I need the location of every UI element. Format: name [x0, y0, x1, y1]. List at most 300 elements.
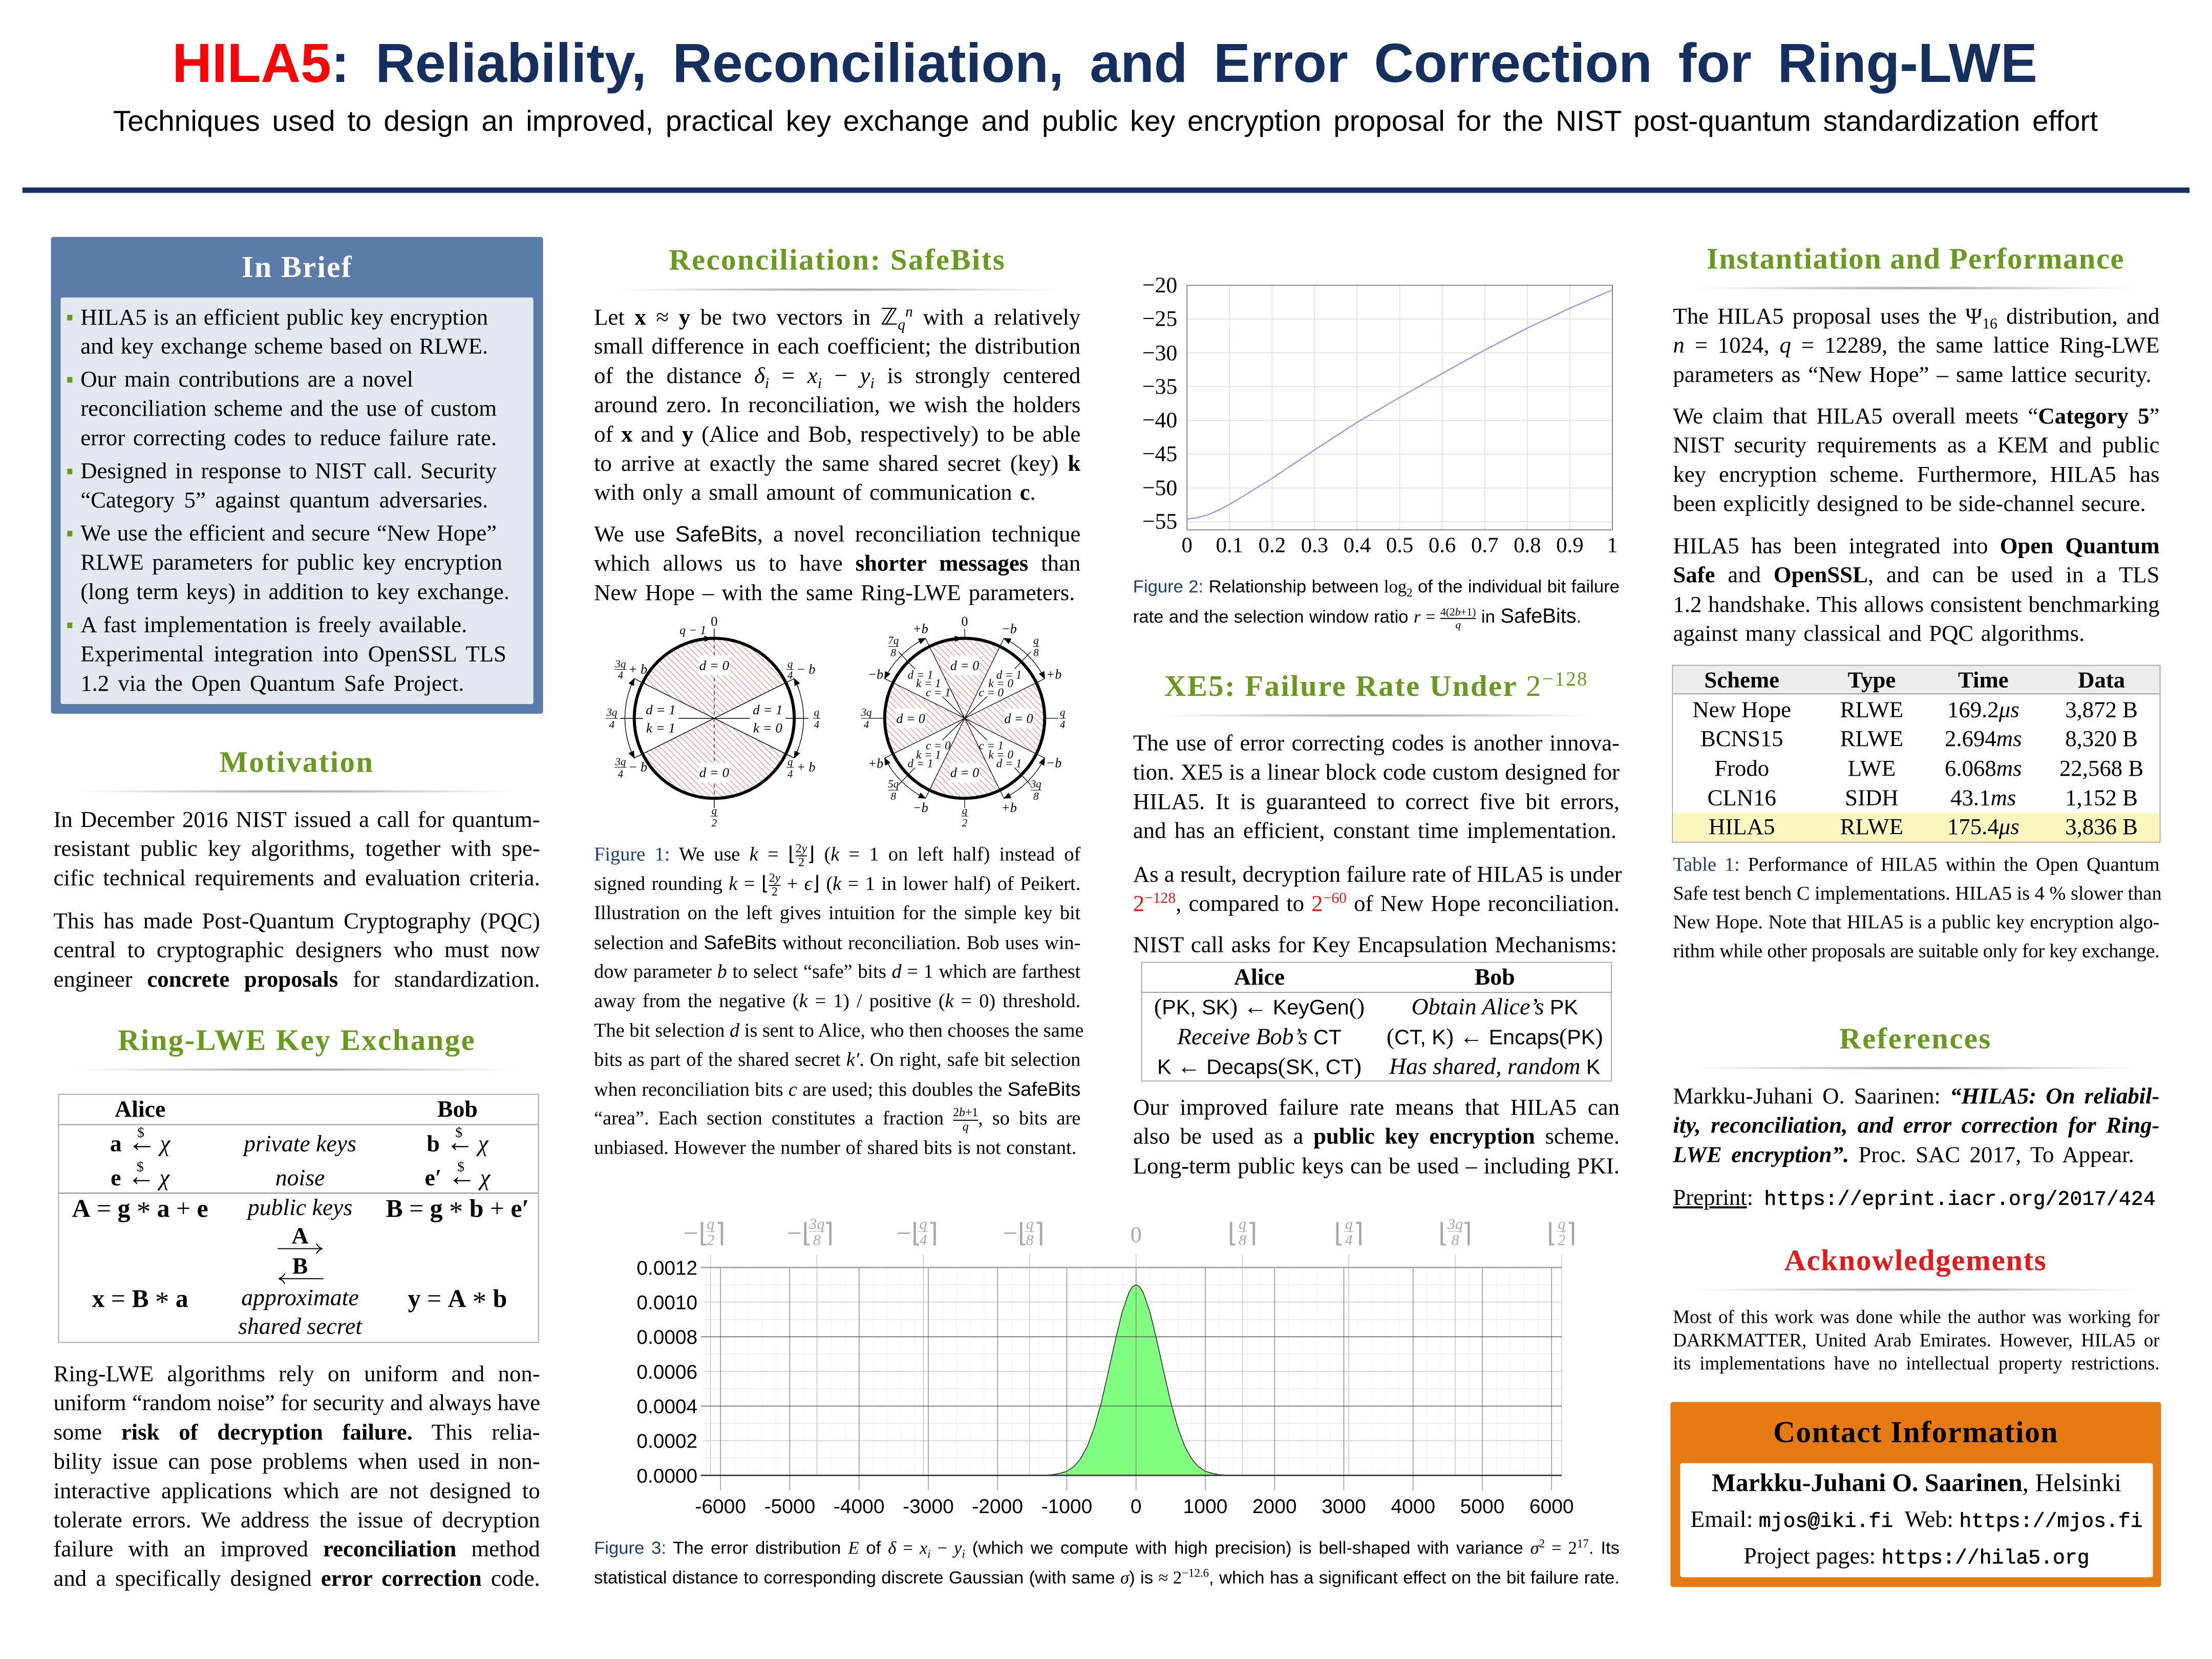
- heading: Ring-LWE Key Exchange: Ring-LWE Key Exchange: [118, 1023, 476, 1057]
- plot area with grid and bell curve: 4000: [1391, 1496, 1435, 1518]
- q fraction labels: ⌉: [1353, 1219, 1364, 1248]
- heading: Reconciliation SafeBits: Reconciliation: SafeBits: [669, 243, 1006, 276]
- header rule: [23, 187, 2189, 193]
- text: ring-LWE explanation: bility issue can pose problems when used in non-: [53, 1449, 540, 1474]
- chart: figure 2 failure rate line: 0.5: [1386, 534, 1413, 558]
- chart: figure 3 error distribution: 0.0000: [636, 1465, 697, 1487]
- right circle diagram: 0: [962, 614, 968, 629]
- chart: figure 2 failure rate line: 0: [1182, 534, 1193, 558]
- bullet 5: 1.2 via the Open Quantum Safe Project.: [80, 670, 464, 696]
- chart: figure 2 failure rate line: 0.4: [1344, 534, 1371, 558]
- text: reference citation: LWE encryption”. Proc. SAC 2017, To Appear.: [1673, 1141, 2134, 1167]
- right circle diagram: k = 0: [988, 748, 1013, 761]
- bullet 3: Designed in response to NIST call. Security: [80, 458, 497, 483]
- heading: References: References: [1839, 1022, 1992, 1055]
- text: instantiation paragraph 2: been explicitly designed to be side-channel secure.: [1673, 491, 2146, 516]
- right circle diagram: d = 1: [996, 668, 1022, 681]
- caption: figure 1: 2y: [769, 871, 780, 885]
- chart: figure 2 failure rate line: −35: [1142, 374, 1177, 399]
- q fraction labels: q: [920, 1216, 927, 1232]
- table: key exchange protocol: b χ: [427, 1131, 488, 1157]
- right circle diagram: d = 1: [996, 757, 1022, 770]
- text: reconciliation paragraph 1: with only a small amount of communication c.: [594, 480, 1036, 505]
- table: key exchange protocol: approximate: [241, 1284, 359, 1310]
- text: reference citation: ity, reconciliation, and error correction for Ring-: [1673, 1112, 2160, 1138]
- q fraction labels: 8: [1026, 1232, 1033, 1249]
- left circle diagram: 0: [711, 613, 718, 629]
- plot area with grid and bell curve: -5000: [764, 1496, 815, 1518]
- table: key exchange protocol: x = B * a: [92, 1284, 188, 1317]
- q fraction labels: ⌉: [1566, 1219, 1577, 1248]
- bullet 5: A fast implementation is freely available.: [80, 612, 467, 637]
- left circle diagram: 3q: [606, 706, 617, 718]
- bullet 1: [80, 303, 488, 361]
- text: reference citation: [1673, 1081, 2160, 1169]
- chart: figure 2 failure rate line: 0.2: [1259, 534, 1286, 558]
- table: performance comparison: Time: [1958, 667, 2009, 693]
- chart: figure 2 failure rate line: −50: [1142, 476, 1177, 500]
- text: ring-LWE explanation: tolerate errors. We address the issue of decryption: [53, 1507, 540, 1533]
- q fraction labels: 2: [1558, 1232, 1565, 1249]
- caption: table 1: [1673, 850, 2160, 965]
- text: motivation paragraph 2: [53, 906, 540, 994]
- contact details: Project pages: https://hila5.org: [1743, 1543, 2090, 1570]
- caption: figure 1: Figure 1: We use k = ⌊ ⌋ (k = 1 on left half) instead of: [594, 844, 1080, 865]
- table: performance comparison: 6.068ms: [1945, 755, 2022, 781]
- text: motivation paragraph 1: cific technical requirements and evaluation criteria.: [53, 865, 540, 890]
- text: ring-LWE explanation: interactive applications which are not designed to: [53, 1478, 540, 1503]
- table: key exchange protocol: $: [455, 1125, 462, 1141]
- table: performance comparison: 1,152 B: [2065, 785, 2138, 810]
- text: XE5 paragraph 2: As a result, decryption failure rate of HILA5 is under: [1133, 861, 1622, 887]
- table: performance comparison: SIDH: [1845, 785, 1899, 810]
- left circle diagram: 3q: [614, 657, 626, 670]
- text: instantiation paragraph 3: HILA5 has been integrated into Open Quantum: [1673, 533, 2160, 558]
- table: key exchange protocol: B = g * b + e′: [386, 1194, 529, 1227]
- right circle diagram: 7q: [888, 634, 899, 647]
- right circle diagram: c = 1: [926, 686, 951, 699]
- left circle diagram: − b: [628, 759, 647, 774]
- arrow: A to Bob: [278, 1243, 324, 1255]
- bullet 3: [80, 456, 497, 515]
- left circle diagram: − b: [797, 662, 815, 676]
- plot area with grid and bell curve: 3000: [1322, 1496, 1366, 1518]
- text: instantiation paragraph 2: NIST security requirements as a KEM and public: [1673, 432, 2160, 458]
- caption: figure 2: 4(2b+1): [1440, 606, 1476, 618]
- left circle diagram: 4: [788, 669, 793, 681]
- right circle diagram: c = 0: [926, 739, 951, 752]
- chart: figure 2 failure rate line: −40: [1142, 408, 1177, 433]
- text: reconciliation paragraph 1: to arrive at exactly the same shared secret (key) k: [594, 450, 1080, 476]
- bullet 2: error correcting codes to reduce failure rate.: [80, 425, 497, 450]
- chart: figure 2 failure rate line: 0.1: [1216, 534, 1243, 558]
- text: XE5 paragraph 1: The use of error correcting codes is another innova-: [1133, 730, 1620, 755]
- right circle diagram: −b: [868, 667, 883, 682]
- right circle diagram: 3q: [1030, 778, 1041, 790]
- table: key exchange protocol: noise: [275, 1164, 325, 1190]
- chart: figure 2 failure rate line: −25: [1142, 307, 1177, 331]
- q fraction labels: ⌉: [1034, 1219, 1045, 1248]
- caption: figure 1: away from the negative (k = 1) / positive (k = 0) threshold.: [594, 990, 1080, 1012]
- left circle diagram: q: [712, 804, 717, 817]
- right circle diagram: q: [1060, 706, 1065, 718]
- right circle diagram: −b: [1001, 622, 1017, 636]
- table: key exchange protocol: [58, 1094, 539, 1343]
- left circle diagram: q − 1: [679, 624, 706, 637]
- table: performance comparison: 2.694ms: [1945, 726, 2022, 751]
- left circle diagram: d = 0: [699, 764, 730, 780]
- table: key exchange protocol: A: [291, 1223, 309, 1249]
- right circle diagram: +b: [868, 756, 883, 771]
- text: motivation paragraph 1: In December 2016 NIST issued a call for quantum-: [53, 806, 540, 832]
- bullet 3: “Category 5” against quantum adversaries.: [80, 487, 488, 513]
- text: acknowledgements: its implementations have no intellectual property restrictions.: [1673, 1353, 2160, 1374]
- bullet 2: reconciliation scheme and the use of custom: [80, 395, 497, 421]
- right circle diagram: k = 0: [988, 677, 1013, 690]
- chart: figure 2 failure rate line: 1: [1607, 534, 1618, 558]
- text: ring-LWE explanation: Ring-LWE algorithms rely on uniform and non-: [53, 1360, 540, 1386]
- table: performance comparison: 3,872 B: [2065, 697, 2138, 722]
- q fraction labels: 8: [813, 1232, 821, 1249]
- text: reconciliation paragraph 2: which allows us to have shorter messages than: [594, 550, 1080, 576]
- q fraction labels: ⌊: [1438, 1219, 1449, 1248]
- table: key exchange protocol: ←: [445, 1126, 474, 1158]
- text: ring-LWE explanation: some risk of decryption failure. This relia-: [53, 1419, 540, 1444]
- panel: contact information: [1670, 1402, 2161, 1587]
- right circle diagram: −b: [912, 800, 928, 815]
- chart: figure 2 failure rate line: 0.7: [1471, 534, 1498, 558]
- q fraction labels: 8: [1239, 1232, 1246, 1249]
- left circle diagram: 2: [712, 817, 717, 829]
- caption: figure 1: bits as part of the shared secret k′. On right, safe bit selection: [594, 1049, 1080, 1071]
- bullet 4: RLWE parameters for public key encryption: [80, 549, 502, 575]
- heading: contact information: Contact Information: [1773, 1415, 2058, 1449]
- text: ring-LWE explanation: failure with an improved reconciliation method: [53, 1536, 540, 1562]
- table: performance comparison: Frodo: [1714, 755, 1769, 781]
- text: XE5 conclusion: Long-term public keys can be used – including PKI.: [1133, 1153, 1620, 1178]
- q fraction labels: −⌊: [684, 1219, 709, 1248]
- caption: figure 3: [594, 1534, 1620, 1592]
- caption: figure 1: The bit selection d is sent to Alice, who then chooses the same: [594, 1019, 1083, 1041]
- q fraction labels: 3q: [809, 1216, 824, 1232]
- table: key exchange protocol: private keys: [244, 1131, 356, 1157]
- heading: XE5 failure rate: XE5: Failure Rate Under 2−128: [1164, 668, 1588, 703]
- table: key exchange protocol: Bob: [437, 1096, 478, 1122]
- right circle diagram: d = 1: [908, 757, 933, 770]
- bullet 5: [80, 610, 506, 698]
- heading: In Brief: In Brief: [242, 250, 352, 284]
- table: key exchange protocol: e χ: [111, 1164, 169, 1190]
- text: reconciliation paragraph 2: We use SafeBits, a novel reconciliation technique: [594, 521, 1080, 547]
- caption: table 1: Safe test bench C implementations. HILA5 is 4 % slower than: [1673, 883, 2162, 904]
- caption: figure 1: q: [963, 1120, 969, 1133]
- caption: figure 1: unbiased. However the number of shared bits is not constant.: [594, 1137, 1076, 1158]
- left circle diagram: 4: [788, 768, 793, 780]
- text: XE5 paragraph 2: [1133, 860, 1620, 919]
- q fraction labels: 8: [1452, 1232, 1459, 1249]
- left circle diagram: 4: [618, 768, 623, 780]
- q fraction labels: ⌉: [1462, 1219, 1472, 1248]
- plot area with grid and bell curve: 0: [1131, 1496, 1142, 1518]
- heading: Acknowledgements: Acknowledgements: [1784, 1243, 2047, 1277]
- plot area with grid and bell curve: -4000: [834, 1496, 885, 1518]
- table: performance comparison: RLWE: [1840, 697, 1903, 722]
- plot area with grid and bell curve: 5000: [1460, 1496, 1504, 1518]
- caption: figure 1: 2y: [796, 842, 807, 856]
- right circle diagram: q: [962, 804, 967, 817]
- table: performance comparison: New Hope: [1692, 697, 1791, 722]
- text: XE5 conclusion: also be used as a public key encryption scheme.: [1133, 1123, 1620, 1149]
- caption: figure 1: when reconciliation bits c are used; this doubles the SafeBits: [594, 1078, 1080, 1100]
- caption: figure 1: 2: [798, 856, 804, 869]
- q fraction labels: 3q: [1447, 1216, 1463, 1232]
- table: KEM operations: Obtain Alice’s PK: [1412, 993, 1578, 1019]
- caption: figure 1: Illustration on the left gives intuition for the simple key bit: [594, 902, 1080, 924]
- table: performance comparison: 3,836 B: [2065, 814, 2138, 839]
- text: reconciliation paragraph 2: [594, 520, 1080, 607]
- table: performance comparison: 43.1ms: [1950, 785, 2016, 810]
- text: XE5 paragraph 1: tion. XE5 is a linear block code custom designed for: [1133, 759, 1620, 785]
- text: motivation paragraph 2: This has made Post-Quantum Cryptography (PQC): [53, 908, 540, 933]
- text: XE5 paragraph 1: and has an efficient, constant time implementation.: [1133, 818, 1617, 843]
- right circle diagram: 8: [891, 646, 897, 658]
- q fraction labels: q: [1239, 1216, 1246, 1232]
- text: instantiation paragraph 1: n = 1024, q = 12289, the same lattice Ring-LWE: [1673, 332, 2160, 358]
- table: KEM operations: Alice: [1234, 964, 1285, 990]
- q fraction labels: 2: [707, 1232, 714, 1249]
- table: KEM operations: (CT, K) ← Encaps(PK): [1387, 1024, 1603, 1050]
- text: instantiation paragraph 3: 1.2 handshake. This allows consistent benchmarking: [1673, 591, 2160, 617]
- chart: figure 2 failure rate line: 0.3: [1301, 534, 1328, 558]
- text: reconciliation paragraph 1: of x and y (Alice and Bob, respectively) to be able: [594, 421, 1080, 446]
- right circle diagram: q: [1033, 634, 1039, 647]
- text: reconciliation paragraph 1: Let x ≈ y be two vectors in ℤqn with a relatively: [594, 304, 1080, 333]
- text: reconciliation paragraph 1: around zero. In reconciliation, we wish the holders: [594, 392, 1080, 417]
- table: key exchange protocol: shared secret: [238, 1313, 362, 1339]
- q fraction labels: 0: [1131, 1223, 1142, 1247]
- plot area with grid and bell curve: [695, 1254, 1574, 1518]
- plot area with grid and bell curve: -1000: [1041, 1496, 1092, 1518]
- text: ring-LWE explanation: [53, 1359, 540, 1593]
- table: performance comparison: 22,568 B: [2059, 755, 2143, 781]
- chart: figure 2 failure rate line: −55: [1142, 509, 1177, 534]
- q fraction labels: ⌉: [823, 1219, 834, 1248]
- bullet marker: [67, 623, 72, 628]
- right circle diagram: −b: [1046, 755, 1061, 770]
- text: instantiation paragraph 2: We claim that HILA5 overall meets “Category 5”: [1673, 403, 2160, 429]
- left circle diagram: d = 0: [699, 657, 730, 673]
- text: motivation paragraph 2: engineer concrete proposals for standardization.: [53, 966, 540, 992]
- text: XE5 conclusion: [1133, 1093, 1620, 1180]
- table: key exchange protocol: a χ: [110, 1131, 170, 1157]
- left circle diagram: q: [788, 657, 793, 670]
- text: motivation paragraph 1: [53, 805, 540, 892]
- right circle diagram: 5q: [888, 778, 899, 790]
- table: key exchange protocol: A = g * a + e: [72, 1194, 208, 1227]
- q fraction labels: ⌉: [1247, 1219, 1258, 1248]
- text: reconciliation paragraph 1: small difference in each coefficient; the distribution: [594, 333, 1080, 359]
- text: preprint link: Preprint: https://eprint.iacr.org/2017/424: [1673, 1184, 2156, 1211]
- bullet 5: Experimental integration into OpenSSL TLS: [80, 641, 506, 667]
- right circle diagram: 4: [1060, 718, 1065, 731]
- plot area with grid and bell curve: 1000: [1183, 1496, 1227, 1518]
- plot area with grid and bell curve: -2000: [972, 1496, 1023, 1518]
- text: instantiation paragraph 3: against many classical and PQC algorithms.: [1673, 621, 2085, 646]
- table: performance comparison: Scheme: [1704, 667, 1779, 693]
- table: KEM operations: K ← Decaps(SK, CT): [1157, 1053, 1362, 1079]
- chart: figure 3 error distribution: 0.0010: [636, 1292, 697, 1314]
- bullet 4: [80, 519, 509, 606]
- right circle diagram: d = 0: [896, 711, 925, 726]
- caption: figure 1: 2b+1: [953, 1106, 978, 1119]
- caption: table 1: Table 1: Performance of HILA5 within the Open Quantum: [1673, 854, 2160, 875]
- text: instantiation paragraph 2: key encryption scheme. Furthermore, HILA5 has: [1673, 461, 2160, 487]
- caption: figure 3: statistical distance to corresponding discrete Gaussian (with same σ) is ≈ 2−12.6, which has a significant effect on the bit failure rate.: [594, 1566, 1620, 1587]
- q fraction labels: −⌊: [896, 1219, 922, 1248]
- q fraction labels: 4: [920, 1232, 927, 1249]
- table: performance comparison: 8,320 B: [2065, 726, 2138, 751]
- chart: figure 3 error distribution: 0.0008: [636, 1327, 697, 1349]
- right circle diagram: 8: [1033, 646, 1039, 658]
- plot area with grid and bell curve: 6000: [1529, 1496, 1574, 1518]
- bullet 2: Our main contributions are a novel: [80, 366, 413, 392]
- text: instantiation paragraph 1: [1673, 302, 2160, 389]
- contact details: [1680, 1463, 2153, 1577]
- table: performance comparison: 169.2μs: [1947, 697, 2019, 722]
- chart: figure 2 failure rate line: 0.8: [1514, 534, 1541, 558]
- right circle diagram: c = 0: [979, 686, 1004, 699]
- text: instantiation paragraph 3: [1673, 531, 2160, 648]
- table: KEM operations: Receive Bob’s CT: [1177, 1024, 1342, 1050]
- caption: figure 1: dow parameter b to select “safe” bits d = 1 which are farthest: [594, 961, 1080, 983]
- table: key exchange protocol: ←: [127, 1126, 156, 1158]
- bullet 2: [80, 365, 497, 453]
- table: key exchange protocol: y = A * b: [408, 1284, 507, 1317]
- panel: In Brief: [51, 237, 543, 714]
- right circle diagram: 2: [962, 817, 967, 829]
- q fraction labels: q: [1345, 1216, 1353, 1232]
- table: performance comparison: Type: [1848, 667, 1896, 693]
- caption: figure 3: Figure 3: The error distribution E of δ = xi − yi (which we compute with high precision) is bell-shaped with variance σ2 = 217. Its: [594, 1537, 1620, 1560]
- text: reconciliation paragraph 1: [594, 303, 1080, 507]
- q fraction labels: q: [1558, 1216, 1565, 1232]
- chart: figure 2 failure rate line: [1123, 265, 1633, 565]
- chart: figure 2 failure rate line: 0.6: [1429, 534, 1456, 558]
- chart: figure 3 error distribution: [591, 1202, 1620, 1518]
- table: performance comparison: Data: [2078, 667, 2125, 693]
- text: motivation paragraph 2: central to cryptographic designers who must now: [53, 937, 540, 963]
- table: key exchange protocol: $: [137, 1125, 144, 1141]
- caption: figure 1: [594, 840, 1080, 1163]
- right circle diagram: +b: [1046, 667, 1061, 682]
- text: ring-LWE explanation: and a specifically designed error correction code.: [53, 1565, 540, 1591]
- left circle diagram: d = 1: [753, 702, 783, 717]
- subtitle: Techniques used to design an improved, practical key exchange and public key encryption proposal for the NIST post-quantum standardization effort: [113, 105, 2098, 138]
- table: performance comparison: RLWE: [1840, 726, 1903, 751]
- left circle diagram: k = 1: [646, 720, 675, 736]
- right circle diagram: d = 1: [908, 668, 933, 681]
- text: NIST call: NIST call asks for Key Encapsulation Mechanisms:: [1133, 932, 1617, 957]
- highlighted HILA5 row: [1673, 813, 2160, 842]
- caption: table 1: rithm while other proposals are suitable only for key exchange.: [1673, 940, 2160, 962]
- table: performance comparison: HILA5: [1709, 814, 1775, 839]
- plot area with grid and bell curve: 2000: [1252, 1496, 1297, 1518]
- q fraction labels: ⌊: [1334, 1219, 1344, 1248]
- title: HILA5: Reliability, Reconciliation, and Error Correction for Ring-LWE: [172, 32, 2037, 94]
- right circle diagram: +b: [912, 622, 928, 636]
- chart: figure 3 error distribution: 0.0012: [636, 1257, 697, 1279]
- q fraction labels: ⌊: [1227, 1219, 1238, 1248]
- text: reference citation: Markku-Juhani O. Saarinen: “HILA5: On reliabil-: [1673, 1083, 2160, 1109]
- left circle diagram: d = 1: [646, 702, 676, 717]
- caption: figure 2: [1133, 572, 1620, 631]
- bullet marker: [67, 469, 72, 474]
- table: performance comparison: CLN16: [1708, 785, 1776, 810]
- left circle diagram: 3q: [614, 755, 626, 768]
- text: instantiation paragraph 3: Safe and OpenSSL, and can be used in a TLS: [1673, 562, 2160, 588]
- text: acknowledgements: Most of this work was done while the author was working for: [1673, 1307, 2160, 1328]
- right circle diagram: [861, 614, 1066, 829]
- right circle diagram: +b: [1001, 800, 1017, 815]
- right circle diagram: 8: [1033, 790, 1039, 802]
- table: key exchange protocol: B: [292, 1253, 308, 1279]
- right circle diagram: 8: [891, 790, 897, 802]
- text: instantiation paragraph 2: [1673, 401, 2160, 518]
- bullet 4: We use the efficient and secure “New Hope”: [80, 520, 497, 546]
- right circle diagram: c = 1: [979, 739, 1004, 752]
- text: XE5 paragraph 1: HILA5. It is guaranteed to correct five bit errors,: [1133, 789, 1620, 814]
- caption: figure 1: “area”. Each section constitutes a fraction , so bits are: [594, 1108, 1080, 1129]
- q fraction labels: [684, 1216, 1577, 1249]
- table: key exchange protocol: e′ χ: [424, 1164, 490, 1190]
- right circle diagram: k = 1: [916, 677, 941, 690]
- text: reconciliation paragraph 2: New Hope – with the same Ring-LWE parameters.: [594, 580, 1075, 605]
- chart: figure 3 error distribution: 0.0004: [636, 1396, 697, 1418]
- right circle diagram: 3q: [861, 706, 871, 718]
- q fraction labels: q: [1026, 1216, 1033, 1232]
- chart: figure 3 error distribution: 0.0002: [636, 1431, 697, 1453]
- table: key exchange protocol: public keys: [248, 1194, 352, 1220]
- table: KEM operations: [1141, 962, 1612, 1081]
- caption: figure 2: Figure 2: Relationship between log2 of the individual bit failure: [1133, 577, 1620, 599]
- left circle diagram: q: [788, 755, 793, 768]
- inner panel background: [60, 297, 534, 704]
- q fraction labels: q: [707, 1216, 714, 1232]
- contact details: Email: mjos@iki.fi Web: https://mjos.fi: [1690, 1506, 2143, 1534]
- plot area with grid and bell curve: -3000: [903, 1496, 954, 1518]
- chart: figure 2 failure rate line: −20: [1142, 273, 1177, 297]
- table: key exchange protocol: $: [457, 1159, 464, 1175]
- caption: figure 1: selection and SafeBits without reconciliation. Bob uses win-: [594, 932, 1080, 953]
- arrow: B to Alice: [278, 1272, 324, 1285]
- text: acknowledgements: DARKMATTER, United Arab Emirates. However, HILA5 or: [1673, 1330, 2160, 1351]
- contact details: Markku-Juhani O. Saarinen, Helsinki: [1712, 1468, 2121, 1497]
- text: motivation paragraph 1: resistant public key algorithms, together with spe-: [53, 836, 540, 861]
- table: KEM operations: (PK, SK) ← KeyGen(): [1154, 993, 1365, 1019]
- q fraction labels: ⌉: [928, 1219, 938, 1248]
- text: XE5 conclusion: Our improved failure rate means that HILA5 can: [1133, 1094, 1620, 1120]
- chart: figure 2 failure rate line: −30: [1142, 341, 1177, 365]
- bullet marker: [67, 531, 72, 537]
- text: instantiation paragraph 1: parameters as “New Hope” – same lattice security.: [1673, 361, 2152, 387]
- left circle diagram: + b: [628, 662, 647, 676]
- left circle diagram: [606, 613, 820, 829]
- caption: figure 2: q: [1455, 618, 1461, 630]
- text: instantiation paragraph 1: The HILA5 proposal uses the Ψ16 distribution, and: [1673, 303, 2160, 332]
- bullet 1: HILA5 is an efficient public key encryption: [80, 304, 488, 330]
- text: reconciliation paragraph 1: of the distance δi = xi − yi is strongly centered: [594, 363, 1080, 392]
- table: performance comparison: BCNS15: [1700, 726, 1783, 751]
